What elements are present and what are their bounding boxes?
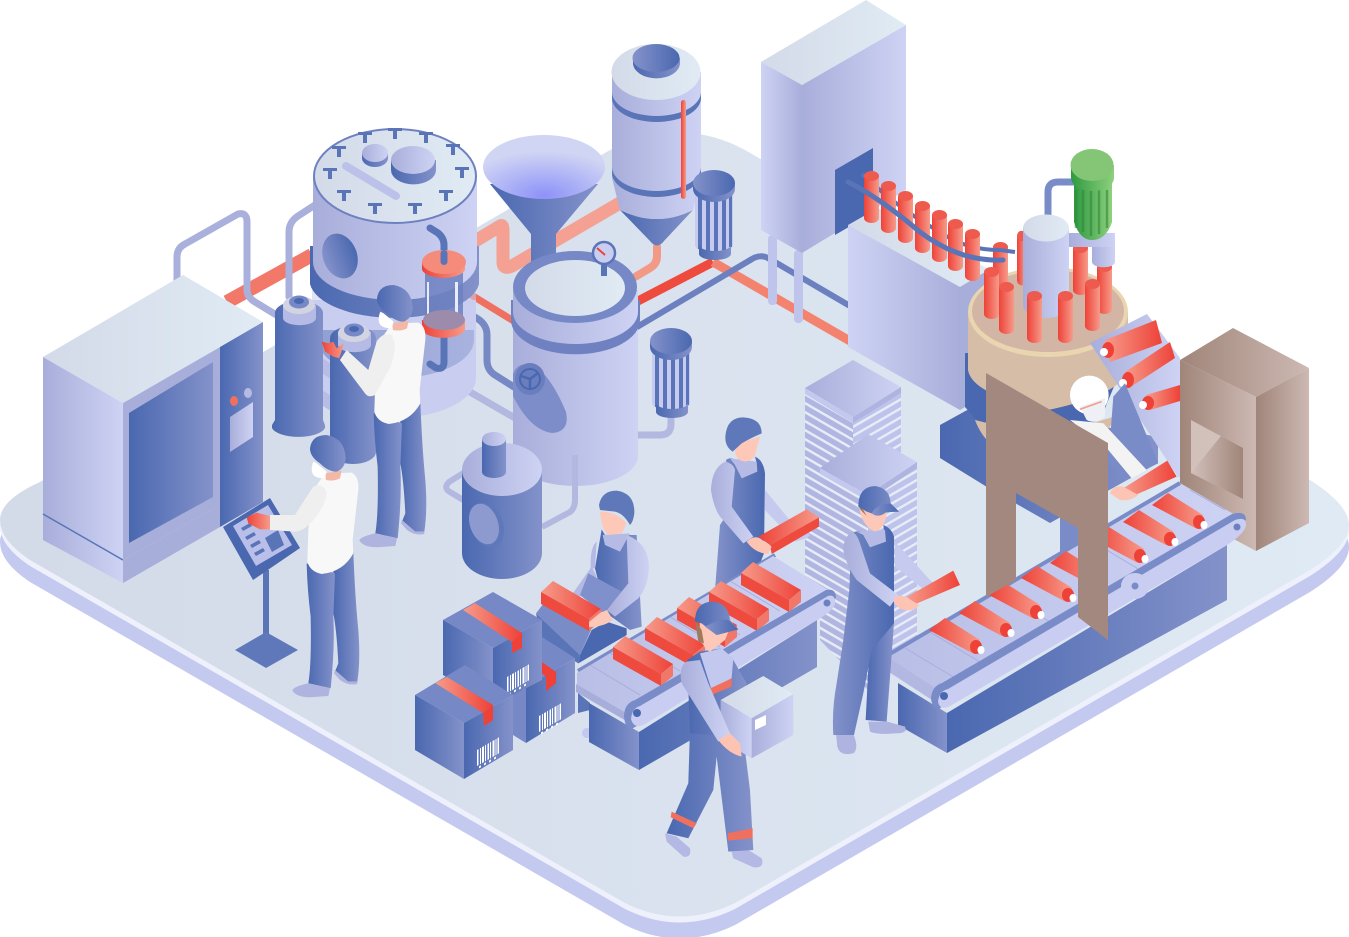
box rear [500,637,575,743]
box top [443,592,542,705]
side hatch with wheel [513,363,567,433]
rear motor [693,170,735,260]
control panel on stand [223,498,300,668]
brown gate [986,373,1108,640]
worker carrying box [665,602,793,867]
silo [612,44,701,246]
green motor [1069,149,1115,267]
red tubes on reactor [1017,231,1026,285]
worker behind the gate in white [1060,376,1177,552]
right conveyor [888,483,1246,753]
packing worker behind left belt [711,417,819,590]
tubes on belt [929,618,984,654]
back pipes [177,200,850,435]
bars on belt [709,581,769,631]
worker at control panel in white coat [247,435,359,697]
tall back cabinet [761,0,906,323]
central pressure tank [511,242,640,486]
brown wrapping cabinet [1180,328,1309,551]
red bar held over box [541,581,613,631]
worker with cap holding red bar [833,486,960,754]
squat tank [446,432,575,579]
lid bolts [323,128,469,214]
packing worker with open box [536,491,649,663]
box front [415,665,513,779]
cardboard boxes [415,592,575,779]
gauge [593,242,615,276]
main control cabinet [43,275,263,583]
slanted tube tray [1090,314,1180,477]
left conveyor [576,555,836,770]
large lidded tank [310,128,479,418]
funnel [483,135,605,262]
machine box under bottles [848,208,990,410]
front motor [650,328,692,418]
sight glass with red caps [422,228,466,368]
stacks of sheets [805,360,917,690]
reactor vessel [940,149,1158,523]
row of red bottles on belt [848,171,1015,281]
worker at tanks in white coat [322,285,426,547]
small dark columns [272,296,376,464]
